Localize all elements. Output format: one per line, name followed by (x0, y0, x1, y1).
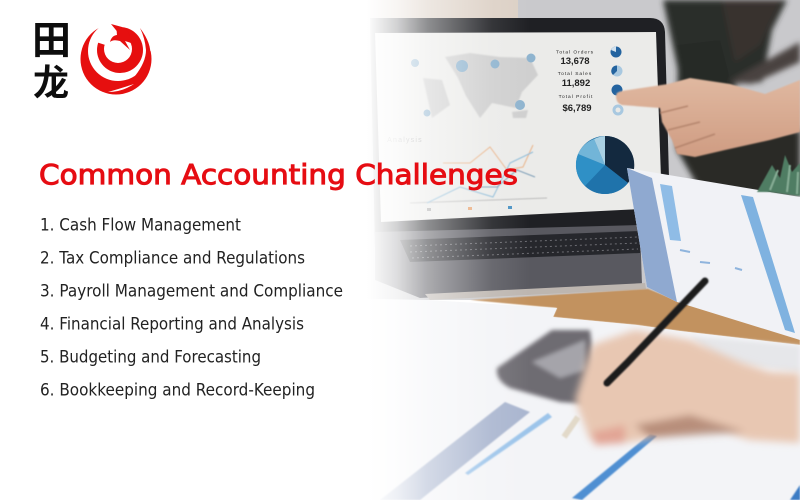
dashboard stats: 13,678 (560, 56, 590, 67)
dashboard stats: $6,789 (562, 103, 592, 114)
logo (32, 10, 155, 106)
white fade overlay (340, 0, 530, 500)
laptop keyboard deck (375, 225, 642, 298)
dashboard chart legend (427, 206, 512, 211)
list of challenges (40, 216, 343, 400)
item 5: 5. Budgeting and Forecasting (40, 348, 261, 368)
laptop front edge (425, 283, 646, 300)
dashboard stats: Total Profit (559, 94, 593, 100)
dashboard stats: Total Sales (558, 71, 592, 77)
dashboard small pies (610, 46, 624, 116)
held document (627, 168, 800, 340)
laptop screen (375, 32, 662, 222)
desk paper blue bands (380, 402, 800, 500)
dashboard world map (423, 53, 538, 118)
logo: kanji mark: 田 (32, 10, 71, 66)
title: Common Accounting Challenges (39, 159, 518, 191)
dashboard donut pie chart (576, 136, 634, 194)
pointing hand (616, 78, 800, 157)
pen (564, 281, 705, 437)
dashboard stats: Analysis (387, 137, 423, 144)
background photo: laptop dashboard and hands (330, 0, 800, 500)
plant leaves (663, 0, 800, 195)
item 1: 1. Cash Flow Management (40, 216, 241, 236)
item 4: 4. Financial Reporting and Analysis (40, 314, 304, 334)
laptop lid bezel (370, 18, 669, 250)
succulent plant (757, 155, 800, 196)
wall (389, 0, 800, 300)
calculator (497, 330, 600, 405)
item 6: 6. Bookkeeping and Record-Keeping (40, 380, 315, 400)
logo: kanji mark: 龙 (33, 54, 69, 106)
wooden table (470, 289, 800, 345)
logo: red dragon emblem (80, 21, 155, 94)
logo: kanji mark (32, 10, 71, 106)
desk documents (396, 300, 800, 500)
dashboard line chart (410, 145, 547, 203)
writing hand (575, 330, 800, 445)
dashboard stats: Total Orders (556, 50, 594, 56)
dashboard stats: 11,892 (562, 78, 590, 89)
dashboard stats (387, 50, 594, 144)
dashboard map markers (411, 54, 536, 116)
item 3: 3. Payroll Management and Compliance (40, 282, 343, 302)
item 2: 2. Tax Compliance and Regulations (40, 248, 305, 268)
